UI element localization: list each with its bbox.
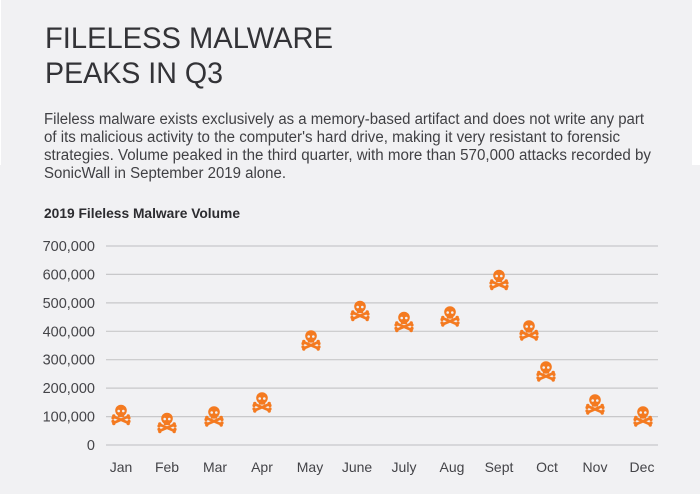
y axis labels: 600,000 xyxy=(43,267,95,283)
x axis labels: June xyxy=(342,459,372,475)
intro text block: SonicWall in September 2019 alone. xyxy=(44,165,286,182)
title: FILELESS MALWARE xyxy=(45,22,333,55)
x axis labels: Apr xyxy=(251,459,273,475)
intro text block: strategies. Volume peaked in the third quarter, with more than 570,000 attacks recorded by xyxy=(44,147,651,164)
y axis labels xyxy=(43,239,95,454)
y axis labels: 100,000 xyxy=(43,410,95,426)
y axis labels: 700,000 xyxy=(43,239,95,255)
chart heading: 2019 Fileless Malware Volume xyxy=(44,206,240,221)
y axis labels: 0 xyxy=(87,438,95,454)
x axis labels: Feb xyxy=(155,459,179,475)
data markers: skull and crossbones xyxy=(111,270,653,433)
chart xyxy=(43,239,658,475)
x axis labels: May xyxy=(297,459,323,475)
x axis labels xyxy=(110,459,654,475)
y axis labels: 500,000 xyxy=(43,296,95,312)
x axis labels: Mar xyxy=(203,459,227,475)
x axis labels: Jan xyxy=(110,459,132,475)
x axis labels: July xyxy=(392,459,416,475)
title: PEAKS IN Q3 xyxy=(45,57,223,90)
intro text block xyxy=(44,111,651,182)
intro text block: Fileless malware exists exclusively as a memory-based artifact and does not write any part xyxy=(44,111,645,128)
intro text block: of its malicious activity to the computer's hard drive, making it very resistant to forensic xyxy=(44,129,620,146)
x axis labels: Nov xyxy=(583,459,607,475)
y axis labels: 200,000 xyxy=(43,381,95,397)
x axis labels: Aug xyxy=(440,459,464,475)
x axis labels: Dec xyxy=(630,459,654,475)
y axis labels: 400,000 xyxy=(43,324,95,340)
x axis labels: Sept xyxy=(485,459,514,475)
y axis labels: 300,000 xyxy=(43,353,95,369)
x axis labels: Oct xyxy=(536,459,558,475)
title xyxy=(45,22,333,90)
